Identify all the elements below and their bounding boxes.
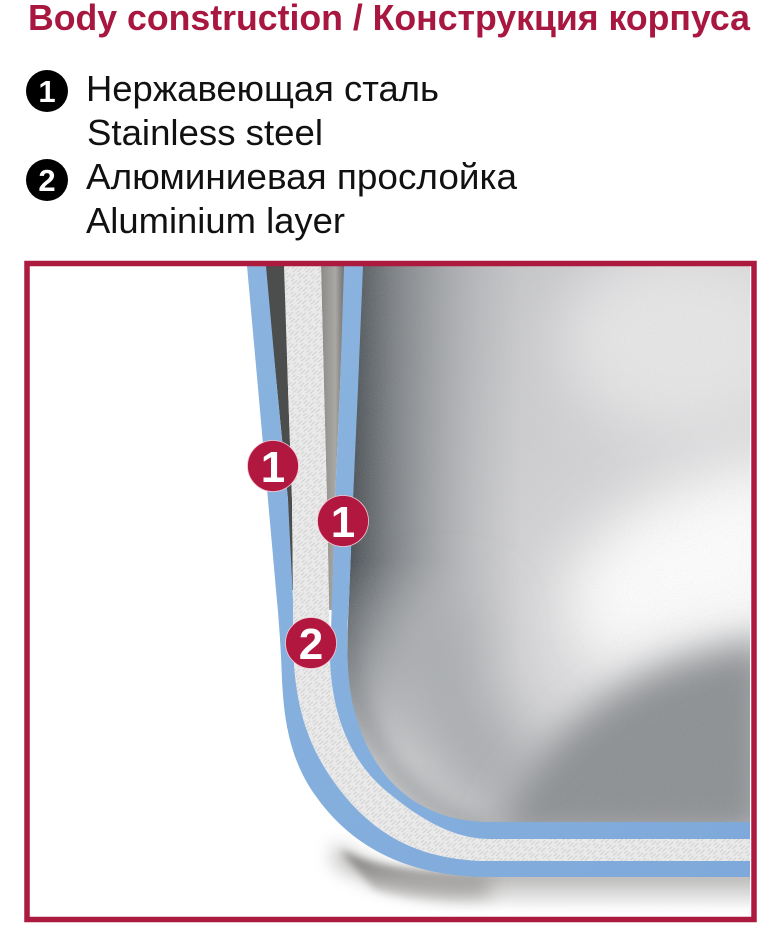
pan interior: [348, 266, 750, 822]
marker 1 outer steel: 1: [261, 443, 285, 492]
legend text: stainless steel: Нержавеющая сталь: [86, 68, 439, 109]
red frame: [27, 264, 754, 920]
cross-section illustration: [247, 250, 782, 911]
cast shadow under pan: [335, 845, 770, 911]
marker 2 aluminium: [286, 618, 336, 669]
outer stainless steel layer: [247, 266, 750, 877]
marker 1 outer steel: [248, 440, 298, 492]
gap right of aluminium: [321, 266, 345, 610]
marker 1 inner steel: [318, 496, 368, 547]
legend marker 2: [26, 159, 68, 201]
legend text: aluminium layer: Алюминиевая прослойка: [86, 156, 518, 197]
legend: [26, 68, 518, 241]
legend marker 1: [26, 70, 68, 112]
legend text: stainless steel: Stainless steel: [87, 112, 323, 153]
aluminium layer: [284, 266, 750, 861]
gap left of aluminium: [265, 266, 293, 590]
legend text: aluminium layer: Aluminium layer: [86, 200, 345, 241]
legend text: aluminium layer: [86, 156, 518, 241]
legend marker 1: 1: [38, 74, 56, 109]
legend marker 2: 2: [38, 163, 56, 198]
marker 1 inner steel: 1: [331, 498, 355, 547]
inner stainless steel layer: [330, 266, 750, 839]
legend text: stainless steel: [86, 68, 439, 153]
marker 2 aluminium: 2: [299, 620, 323, 669]
